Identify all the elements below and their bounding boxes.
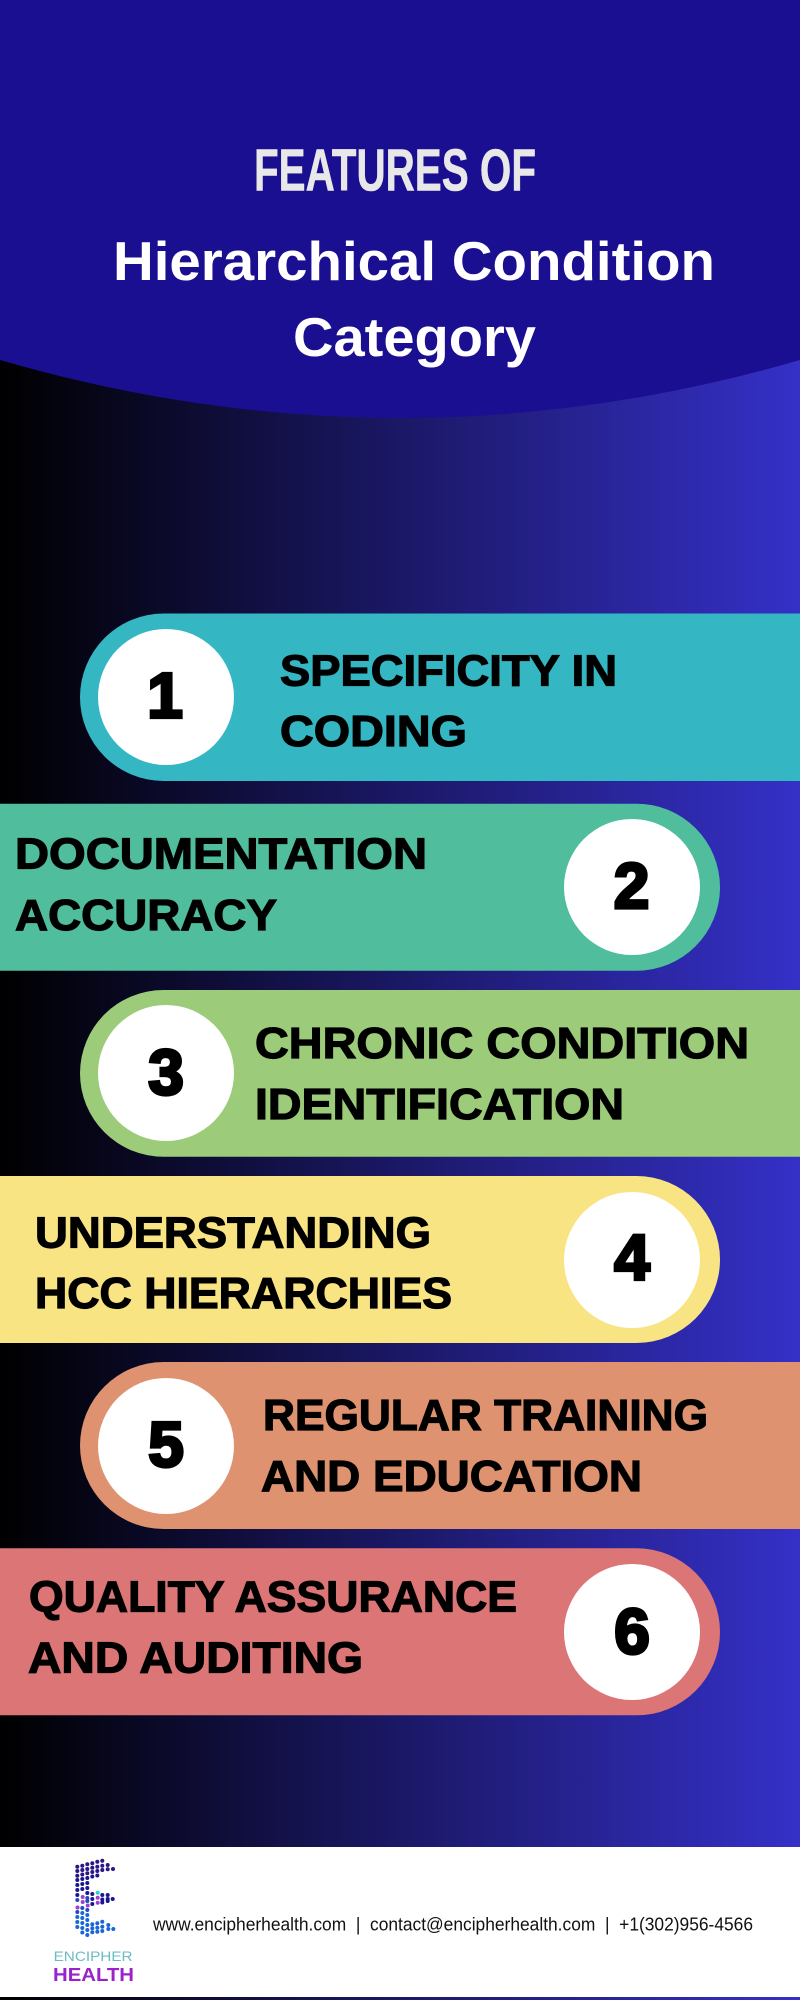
number badge 2	[564, 819, 700, 955]
label: documentation accuracy	[15, 830, 427, 940]
label: documentation accuracy: DOCUMENTATION	[15, 830, 427, 879]
label: understanding hcc hierarchies: HCC HIERARCHIES	[35, 1269, 452, 1318]
label: quality assurance and auditing: AND AUDITING	[28, 1634, 363, 1683]
panel: feature 1	[80, 614, 800, 781]
title: hierarchical condition: Hierarchical Condition	[113, 230, 715, 292]
title: features of: FEATURES OF	[254, 138, 536, 204]
panel: feature 4	[0, 1176, 720, 1343]
label: regular training and education	[261, 1391, 708, 1501]
label: chronic condition identification: CHRONIC CONDITION	[255, 1019, 749, 1068]
label: chronic condition identification: IDENTIFICATION	[255, 1080, 624, 1129]
logo: encipher health	[53, 1859, 134, 1985]
number badge 4	[564, 1192, 700, 1328]
number badge 3	[98, 1005, 234, 1141]
panel: feature 2	[0, 804, 720, 971]
label: understanding hcc hierarchies: UNDERSTANDING	[35, 1208, 431, 1257]
number badge 5: 5	[148, 1408, 184, 1480]
number badge 3: 3	[148, 1036, 184, 1108]
number badge 1	[98, 629, 234, 765]
label: regular training and education: REGULAR TRAINING	[263, 1391, 708, 1440]
panel: feature 5	[80, 1362, 800, 1529]
label: quality assurance and auditing: QUALITY ASSURANCE	[29, 1573, 517, 1622]
number badge 5	[98, 1378, 234, 1514]
title: category: Category	[293, 306, 536, 368]
label: understanding hcc hierarchies	[35, 1208, 452, 1318]
panel: feature 6	[0, 1548, 720, 1715]
header panel	[0, 0, 800, 418]
label: specificity in coding	[280, 646, 617, 756]
label: specificity in coding: SPECIFICITY IN	[280, 646, 617, 695]
label: documentation accuracy: ACCURACY	[15, 891, 277, 940]
number badge 6: 6	[614, 1596, 650, 1668]
logo text: health: HEALTH	[53, 1965, 134, 1985]
number badge 4: 4	[614, 1222, 650, 1294]
footer panel	[0, 1847, 800, 1997]
number badge 1: 1	[147, 660, 183, 732]
panel: feature 3	[80, 990, 800, 1157]
label: chronic condition identification	[255, 1019, 749, 1129]
label: quality assurance and auditing	[28, 1573, 517, 1683]
contact line: www.encipherhealth.com | contact@encipherhealth.com | +1(302)956-4566	[152, 1914, 753, 1934]
number badge 2: 2	[614, 850, 649, 922]
icon: dotted E	[75, 1859, 115, 1937]
label: regular training and education: AND EDUCATION	[261, 1452, 642, 1501]
label: specificity in coding: CODING	[280, 707, 467, 756]
number badge 6	[564, 1564, 700, 1700]
logo text: encipher: ENCIPHER	[54, 1948, 133, 1964]
